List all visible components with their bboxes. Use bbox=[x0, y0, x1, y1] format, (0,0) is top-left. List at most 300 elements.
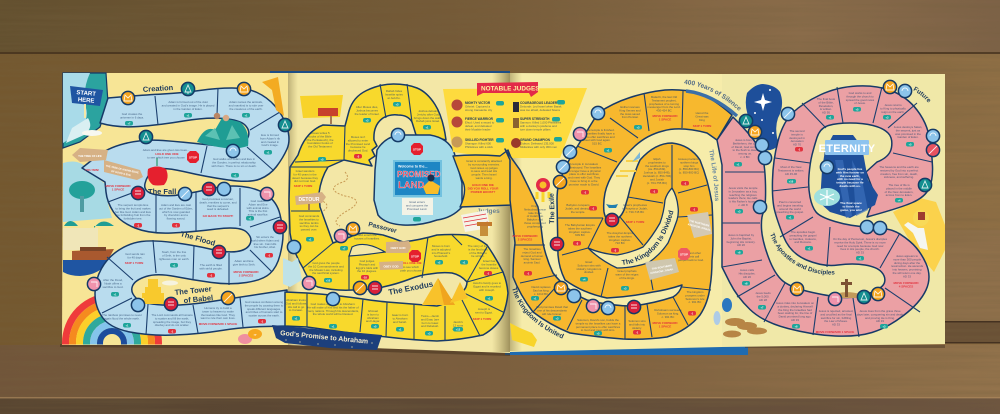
page 3 cell texts: Solomon, David's son, builds the bbox=[577, 318, 619, 322]
page 2 cell texts: household. bbox=[434, 254, 448, 258]
start here corner with flag bbox=[63, 73, 108, 148]
page 1 cell texts: God's image. bbox=[262, 143, 279, 147]
page 2 cell texts: God and follows bbox=[286, 301, 307, 305]
game tokens: all circular icons bbox=[87, 80, 940, 315]
page 3 score pills: +4 bbox=[583, 278, 586, 282]
page 4 cell texts: AD 70 bbox=[793, 143, 801, 147]
page 2 cell texts: (the Pentateuch), the bbox=[306, 138, 334, 142]
banner: God's Promise to Abraham: God's Promise to Abraham bbox=[280, 330, 368, 346]
page 2 cell texts: books of the Bible bbox=[309, 134, 332, 138]
page 3 score pills: -3 bbox=[614, 248, 617, 252]
page 4 cell texts bbox=[727, 91, 924, 334]
page 3 cell texts: take those bbox=[528, 211, 542, 215]
page 2 cell texts: Jericho after God bbox=[417, 112, 439, 116]
page 2 score pills: +3 bbox=[396, 102, 399, 106]
page 1 cell texts: disobey and do not scatter. bbox=[155, 323, 189, 327]
page 3 cell texts: Babylon and bbox=[527, 218, 543, 222]
page 3 cell texts: The new temple is finished. bbox=[579, 128, 615, 132]
page 1 cell texts: the creatures of the earth. bbox=[229, 107, 263, 111]
page 1 cell texts: his brother, Abel. bbox=[254, 245, 276, 249]
page 3 score pills: -1 bbox=[653, 190, 656, 194]
page 1 cell texts: and tribes of humans start to bbox=[246, 310, 283, 314]
eternity panel: dwells with us. bbox=[839, 184, 861, 188]
page 1 cell texts: speak different languages, bbox=[247, 307, 281, 311]
panel: pink spiral track, Jesus to Eternity bbox=[717, 86, 933, 337]
page 1 cell texts: give birth to Seth. bbox=[233, 262, 255, 266]
page 1 score pills: -1 bbox=[210, 274, 213, 278]
page 1 cell texts: Adam and Eve bbox=[235, 259, 254, 263]
page 3 cell texts: Israel's prophesies bbox=[623, 203, 648, 207]
page 4 cell texts: receive the Holy Spirit. There is no more bbox=[834, 240, 886, 244]
page 1 cell texts: from Adam's rib bbox=[260, 136, 280, 140]
sign: welcome to the promised land: PROMISED bbox=[397, 170, 441, 179]
page 2 cell texts: and is adopted bbox=[432, 247, 451, 251]
page 2 cell texts: Moses writes 5 bbox=[310, 131, 330, 135]
page 4 cell texts: the serpent, just as bbox=[896, 128, 921, 132]
banner: notable judges bbox=[477, 82, 540, 97]
page 4 cell texts: Jesus calls bbox=[740, 268, 755, 272]
page 1 score pills: +1 bbox=[249, 216, 252, 220]
page 4 cell texts: Most of the New bbox=[781, 165, 802, 169]
page 3 cell texts: Kings bbox=[531, 204, 539, 208]
page 2 cell texts: for 40 years in the bbox=[293, 172, 317, 176]
page 3 cell texts: Testament prophet, bbox=[652, 98, 677, 102]
page 3 cell texts: 1 SPACE bbox=[659, 117, 671, 121]
red slash token bbox=[926, 143, 940, 157]
orange crown tokens bbox=[121, 80, 897, 301]
page 4 cell texts: the 5,000. bbox=[757, 294, 770, 298]
Adam and Eve in the bush illustration bbox=[197, 113, 248, 149]
page 4 cell texts: to the flesh to dwell bbox=[733, 148, 758, 152]
page 3 score pills bbox=[524, 125, 698, 336]
page 2 cell texts: Joshua defeats bbox=[418, 109, 438, 113]
page 4 cell texts: AD 26 bbox=[737, 243, 745, 247]
page 1 cell texts: Noah, from the line bbox=[162, 250, 187, 254]
sign: exile signpost bbox=[645, 258, 679, 280]
page 3 cell texts: kingdom captive. bbox=[569, 230, 591, 234]
page 4 cell texts: across from to Eden. bbox=[886, 193, 913, 197]
page 3 cell texts: stop him bbox=[684, 164, 695, 168]
page 3 cell texts: Judah, and destroys bbox=[565, 206, 592, 210]
sign: exile signpost: KINGDOM: JUDAH bbox=[650, 267, 674, 275]
page 2 cell texts: God commands bbox=[299, 214, 320, 218]
page 4 cell texts: MOVE FORWARD 1 SPACE bbox=[816, 330, 854, 334]
page 1 cell texts: Adam names the animals, bbox=[229, 100, 263, 104]
page 4 cell texts: and Romans. bbox=[794, 240, 812, 244]
page 1 cell texts: God causes confusion among bbox=[245, 300, 284, 304]
page 3 cell texts: The Babylonian Empire bbox=[565, 223, 595, 227]
book cover edges bbox=[60, 71, 945, 356]
page 3 cell texts: MOVE FORWARD bbox=[652, 114, 678, 118]
page 4 cell texts: Paul is converted bbox=[779, 200, 801, 204]
Jesus figure illustration bbox=[904, 210, 929, 250]
page 4 cell texts: Jesus appears to bbox=[896, 254, 918, 258]
page 1 cell texts: to scatter and fill the earth, bbox=[155, 316, 189, 320]
heading: The Exile: The Exile bbox=[548, 193, 554, 224]
page 1 cell texts: Eve sin. Cain kills bbox=[254, 242, 277, 246]
panel: judges cell bbox=[453, 150, 512, 207]
page 3 cell texts: 722 BC bbox=[615, 241, 625, 245]
page 2 cell texts: Rahab hides bbox=[386, 89, 403, 93]
page 4 cell texts: temple is bbox=[791, 132, 803, 136]
panel: blue snake track, Creation to Babel bbox=[82, 88, 289, 335]
page 1 cell texts: Adam and Eve are cast bbox=[161, 203, 191, 207]
heading: The Apostles and Disciples: The Apostles and Disciples bbox=[770, 232, 835, 276]
page 4 score pills: +5 bbox=[909, 142, 912, 146]
page 2 cell texts: at Jericho. bbox=[387, 96, 401, 100]
page 2 cell texts: many nations. Through his descendants, bbox=[307, 309, 359, 313]
judges right column: Deborah: Led Israel when Barak bbox=[520, 104, 562, 108]
page 2 cell texts: desert because they bbox=[292, 176, 319, 180]
sign: detour bbox=[295, 192, 326, 210]
panel: judges cell: by surrounding enemies. bbox=[468, 162, 500, 166]
page 2 cell texts: SKIP 1 TURN bbox=[294, 184, 312, 188]
page 2 cell texts: to Abraham bbox=[393, 316, 408, 320]
page 2 cell texts: Moses is born bbox=[432, 244, 450, 248]
page 1 cell texts: Adam is formed out of the dust bbox=[168, 100, 208, 104]
page 2 score pills: +12 bbox=[456, 328, 461, 332]
sign: welcome to the promised land: LAND bbox=[398, 180, 425, 191]
page 2 cell texts: the sacrificial system. bbox=[312, 271, 340, 275]
sign: northern kingdom: KINGDOM: ISRAEL bbox=[687, 222, 712, 232]
page 2 cell texts: become slaves. bbox=[479, 266, 499, 270]
page 2 cell texts: Joshua becomes bbox=[356, 108, 378, 112]
page 1 cell texts: forbidden tree. bbox=[124, 217, 143, 221]
panel: judges cell: people. Then Israel bbox=[472, 173, 497, 177]
note: Israel enters the land bbox=[402, 198, 433, 215]
panel: judges cell: wants a king. bbox=[476, 176, 493, 180]
icon: apple bbox=[148, 158, 168, 186]
page 3 cell texts: one of his descendants bbox=[537, 308, 567, 312]
page 1 cell texts: to bring the fruit and makes bbox=[115, 206, 151, 210]
page 4 score pills: +1 bbox=[829, 116, 832, 120]
sign: the tree of life bbox=[72, 148, 108, 162]
eternity panel: the new earth, bbox=[840, 174, 860, 178]
page 4 score pills: +3 bbox=[738, 210, 741, 214]
panel: notable judges bbox=[443, 82, 587, 160]
page 1 cell texts: scatter across the earth. bbox=[248, 314, 280, 318]
page 4 cell texts: Jesus is rejected, arrested, bbox=[819, 309, 853, 313]
page 4 cell texts: God works to and bbox=[849, 91, 872, 95]
page 4 cell texts: AD 33 bbox=[876, 319, 884, 323]
sign: detour: DETOUR bbox=[298, 197, 320, 203]
heading: The Kingdom Is Divided: The Kingdom Is Divided bbox=[622, 210, 674, 265]
page 1 cell texts: The earth is filled bbox=[200, 263, 222, 267]
page 1 cell texts: and mankind is to rule over bbox=[229, 103, 263, 107]
bubbles: bottom corner decoration: !? bbox=[254, 333, 257, 337]
page 4 cell texts: Jesus rises from the grave three bbox=[859, 309, 901, 313]
page 2 cell texts: the leader of Israel. bbox=[355, 112, 380, 116]
page 3 score pills: -3 bbox=[576, 242, 579, 246]
page 3 cell texts: idolatry; kingdom is bbox=[577, 267, 602, 271]
panel: orange spiral track, Kingdom to Silence bbox=[505, 90, 737, 339]
judges right column: COURAGEOUS LEADER bbox=[520, 101, 558, 105]
page 1 cell texts: HOLD ONE ONE bbox=[155, 152, 179, 156]
page 3 cell texts: c. 931 BC bbox=[689, 300, 701, 304]
page 4 cell texts: it His Father's house. bbox=[729, 200, 757, 204]
page 1 cell texts: The rainbow promises to never bbox=[102, 313, 142, 317]
page 2 cell texts: the whole world will be blessed. bbox=[313, 312, 353, 316]
heading: The Exodus: The Exodus bbox=[388, 279, 434, 297]
page 2 cell texts: Isaac is born bbox=[392, 313, 409, 317]
teal tree tokens bbox=[139, 82, 932, 304]
eternity panel: game, you win! bbox=[840, 208, 862, 212]
panel: promised land lake bbox=[374, 135, 462, 225]
page 1 cell texts: want to rule their own lives. bbox=[201, 316, 236, 320]
page 1 cell texts: out of the Garden of Eden, bbox=[159, 206, 193, 210]
page 4 cell texts: MOVE FORWARD bbox=[893, 281, 919, 285]
judges left column: MIGHTY VICTOR bbox=[465, 101, 491, 105]
page 2 cell texts: Abraham trusts bbox=[286, 298, 306, 302]
page 2 cell texts: Israel has bbox=[483, 259, 496, 263]
page 2 score pills bbox=[292, 102, 493, 336]
page 3 cell texts: Solomon as king. bbox=[657, 311, 679, 315]
banner: notable judges: NOTABLE JUDGES bbox=[481, 86, 540, 92]
page 2 cell texts: path you choose bbox=[400, 268, 422, 272]
page 4 cell texts: AD 45-96 bbox=[785, 172, 797, 176]
page 3 cell texts: is destroyed. The Israelites bbox=[567, 165, 602, 169]
loaves and fish illustration bbox=[714, 298, 767, 338]
page 3 cell texts: people back to God. bbox=[678, 258, 704, 262]
page 3 cell texts: to Assyria or Judah, bbox=[622, 206, 648, 210]
judges left column: FIERCE WARRIOR bbox=[465, 117, 494, 121]
page 4 cell texts: around the world bbox=[779, 207, 801, 211]
page 3 cell texts: David replaces bbox=[531, 285, 551, 289]
page 2 cell texts: 12 sons bbox=[453, 323, 464, 327]
page 3 score pills: -1 bbox=[584, 190, 587, 194]
page 3 cell texts: Esther rescues bbox=[620, 105, 640, 109]
panel: judges cell: DID YOU ROLL YOUR bbox=[468, 186, 499, 190]
page 1 cell texts: Humans try to build a bbox=[204, 306, 232, 310]
page 3 cell texts: King Xerxes and bbox=[619, 108, 641, 112]
page 2 cell texts: to see which bbox=[403, 265, 419, 269]
page 3 cell texts: 2 SPACES bbox=[518, 237, 532, 241]
page 3 score pills: -1 bbox=[636, 330, 639, 334]
page 1 cell texts: animal sacrifice. bbox=[248, 213, 269, 217]
page 3 cell texts: idolatry. bbox=[632, 326, 642, 330]
page 1 cell texts: spreading the image, but they bbox=[153, 320, 192, 324]
page 4 cell texts: to King to physically bbox=[880, 106, 906, 110]
page 4 cell texts: AD 26 bbox=[743, 275, 751, 279]
stop sign: STOP bbox=[411, 254, 419, 258]
eternity panel: to finish the bbox=[842, 204, 860, 208]
page 3 score pills: -1 bbox=[684, 182, 687, 186]
heading: The Tower of Babel: of Babel bbox=[183, 293, 214, 305]
heading: Passover: Passover bbox=[368, 221, 398, 235]
heading: eternity: ETERNITY bbox=[819, 143, 876, 155]
page 3 cell texts: MOVE FORWARD bbox=[652, 321, 678, 325]
sign: welcome to the promised land: Welcome to the... bbox=[398, 164, 428, 168]
panel: judges cell: God raises up judges bbox=[470, 166, 498, 170]
heading: The Life of Jesus: The Life of Jesus bbox=[709, 149, 718, 201]
page 1 cell texts: in the Garden of Eden. bbox=[173, 107, 203, 111]
page 4 cell texts: John the Baptist, bbox=[730, 236, 752, 240]
page 4 score pills: +1 bbox=[808, 246, 811, 250]
stop sign: STOP bbox=[189, 156, 197, 160]
page 1 cell texts: again flood the whole earth. bbox=[104, 316, 140, 320]
judges right column: Gideon: Defeated 135,000 bbox=[520, 142, 554, 146]
page 4 cell texts: preaching the gospel. bbox=[776, 210, 804, 214]
sign: golden calf bbox=[386, 241, 411, 253]
page 2 cell texts: into Pharaoh's bbox=[432, 251, 451, 255]
orange slash tokens bbox=[221, 175, 567, 305]
judges left column: SKILLED FIGHTER bbox=[465, 138, 494, 142]
page 1 cell texts: MOVE FORWARD bbox=[233, 270, 259, 274]
stop sign: STOP bbox=[413, 148, 421, 152]
page 2 cell texts: Israelite spies bbox=[385, 92, 403, 96]
sign: exile signpost: THE SOUTHERN bbox=[651, 263, 672, 271]
page 1 cell texts: This is the first bbox=[249, 209, 268, 213]
judges left column bbox=[452, 100, 504, 149]
page 3 cell texts: 1 SPACE bbox=[659, 324, 671, 328]
page 2 cell texts: the Old Testament bbox=[308, 145, 332, 149]
page 3 score pills: -1 bbox=[592, 206, 595, 210]
page 2 cell texts bbox=[286, 89, 502, 331]
page 4 cell texts: of Jesus. bbox=[854, 101, 866, 105]
page 1 score pills: -1 bbox=[171, 330, 174, 334]
page 3 cell texts: no longer have a physical bbox=[568, 169, 601, 173]
page 2 cell texts: and Sarah. bbox=[393, 320, 407, 324]
heading: The Flood: The Flood bbox=[179, 229, 217, 248]
note: Israel enters the land: Promised Land. bbox=[407, 207, 427, 211]
judges left column: Shamgar: Killed 600 bbox=[465, 142, 491, 146]
page 4 cell texts: The heavens and the earth are bbox=[879, 165, 919, 169]
page 2 cell texts: Egypt and is reunited bbox=[473, 284, 501, 288]
page 2 score pills: +3 bbox=[366, 118, 369, 122]
page 1 score pills: +1 bbox=[187, 114, 190, 118]
page 1 cell texts: 2 SPACES bbox=[239, 273, 253, 277]
page 2 score pills: +1 bbox=[463, 260, 466, 264]
page 3 cell texts: SKIP 1 TURN bbox=[626, 220, 644, 224]
page 3 cell texts: takes the southern bbox=[568, 226, 592, 230]
page 4 score pills: +3 bbox=[886, 116, 889, 120]
page 2 cell texts: is born to bbox=[367, 312, 379, 316]
page 4 score pills: +3 bbox=[883, 324, 886, 328]
page 3 score pills: +3 bbox=[624, 286, 627, 290]
page 2 cell texts: allowed to enter bbox=[348, 138, 368, 142]
page 4 cell texts: Jesus returns bbox=[884, 103, 902, 107]
page 2 score pills: -3 bbox=[357, 154, 360, 158]
page 2 cell texts: is the first book bbox=[468, 247, 488, 251]
heading: 400 Years of Silence: 400 Years of Silence bbox=[684, 80, 741, 110]
heading: The Tower of Babel: The Tower bbox=[174, 284, 212, 297]
page 3 cell texts: permanent place to offer sacrifices bbox=[576, 325, 621, 329]
page 4 cell texts: been waiting for, the line of bbox=[778, 311, 812, 315]
page 4 cell texts: through the church to bbox=[846, 94, 874, 98]
gutter shading bbox=[288, 73, 522, 352]
page 3 cell texts: SKIP 1 TURN bbox=[693, 124, 711, 128]
page 3 cell texts: Hezekiah (c. 854-796) bbox=[643, 174, 671, 178]
page 4 cell texts: Jesus feeds bbox=[755, 291, 771, 295]
page 4 cell texts: and crucified as the final bbox=[820, 312, 852, 316]
page 4 cell texts: AD 33 bbox=[832, 323, 840, 327]
eternity panel: The final space bbox=[840, 201, 862, 205]
page 4 cell texts: David promised long ago. bbox=[779, 315, 812, 319]
page 3 cell texts: warn of the reigns bbox=[616, 272, 639, 276]
page 4 cell texts: was promised in the bbox=[895, 132, 921, 136]
page 4 cell texts: leaders there; He calls bbox=[729, 196, 758, 200]
judges left column: their Moabite leader bbox=[465, 128, 491, 132]
page 3 cell texts: Nebuchadnezzar bbox=[524, 207, 546, 211]
page 1 cell texts: God walks with Adam and Eve in bbox=[213, 157, 255, 161]
page 3 cell texts: meet with God again. bbox=[583, 138, 611, 142]
page 4 cell texts: beginning His ministry. bbox=[727, 240, 756, 244]
page 2 cell texts: SKIP 1 TURN bbox=[473, 317, 491, 321]
page 1 score pills: +1 bbox=[173, 264, 176, 268]
page 4 cell texts: Revelation, bbox=[819, 104, 833, 108]
page 2 cell texts: and Hagar. bbox=[366, 319, 380, 323]
page 2 cell texts: foundation books of bbox=[307, 141, 333, 145]
page 4 cell texts: His disciples. bbox=[739, 271, 756, 275]
kingdom divided slot bbox=[588, 188, 678, 268]
page 3 cell texts: The Israelites finally have a bbox=[579, 131, 615, 135]
page 4 cell texts: preaching the gospel bbox=[790, 233, 817, 237]
page 1 cell texts: the people by causing them to bbox=[245, 303, 284, 307]
page 4 cell texts: into heaven, promising bbox=[892, 268, 922, 272]
heading: The Kingdom Is United: The Kingdom Is United bbox=[512, 286, 564, 338]
page 3 score pills: -1 bbox=[527, 272, 530, 276]
passover cut-out bbox=[349, 244, 385, 256]
page 3 cell texts: demand a human bbox=[521, 254, 544, 258]
panel: judges cell: to save and lead His bbox=[471, 169, 498, 173]
page 1 cell texts: righteous man on earth. bbox=[159, 257, 189, 261]
page 3 cell texts: from Persian bbox=[622, 115, 639, 119]
page 2 cell texts: born to Isaac bbox=[422, 321, 439, 325]
page 1 cell texts: flaming sword. bbox=[167, 217, 186, 221]
page 1 cell texts: with sinful people. bbox=[200, 266, 223, 270]
page 3 cell texts: A temple in Jerusalem bbox=[570, 162, 599, 166]
page 2 cell texts: the Israelite bbox=[482, 262, 497, 266]
page 1 cell texts: God makes bbox=[251, 199, 266, 203]
page 2 cell texts: the 10 Commandments and bbox=[308, 264, 344, 268]
page 4 score pills: +8 bbox=[795, 324, 798, 328]
silence strip above the arc bbox=[686, 91, 737, 116]
panel: judges cell: HOLD ONE DIE bbox=[472, 183, 494, 187]
page 3 score pills: -1 bbox=[691, 312, 694, 316]
stop sign bbox=[187, 151, 199, 163]
page 4 cell texts: the Law of Moses. bbox=[824, 319, 848, 323]
panel: judges cell: Israel is constantly attacked bbox=[466, 159, 502, 163]
page 4 cell texts: and proving He is King. bbox=[865, 316, 895, 320]
page 1 cell texts: which is now guarded bbox=[162, 210, 190, 214]
page 1 cell texts: sacrifice to God. bbox=[103, 285, 124, 289]
page 1 cell texts: GO BACK TO START! bbox=[203, 214, 233, 218]
page 2 score pills: -10 bbox=[363, 276, 367, 280]
page 4 cell texts: Jesus is born in bbox=[735, 138, 755, 142]
page 3 cell texts: promise made to David. bbox=[569, 182, 599, 186]
page 2 cell texts: Jacob's family goes to bbox=[473, 281, 502, 285]
page 2 cell texts: and Esau (are bbox=[421, 317, 439, 321]
judges right column: Midianites with only 300 men bbox=[520, 145, 558, 149]
page 4 cell texts: of the New Jerusalem, bbox=[885, 190, 914, 194]
page 4 cell texts: to Gentiles, Judeans, bbox=[789, 237, 817, 241]
page 4 cell texts: of the Bible, bbox=[818, 100, 834, 104]
page 4 cell texts: The second bbox=[789, 129, 805, 133]
page 1 cell texts: Adam and Eve are given two trees... bbox=[143, 148, 189, 152]
page 1 cell texts: God sends rain bbox=[125, 252, 145, 256]
sign: welcome to the promised land bbox=[393, 160, 442, 197]
page 4 score pills: +8 bbox=[738, 250, 741, 254]
page 3 cell texts: and Josiah bbox=[650, 177, 664, 181]
yellow fortress illustration bbox=[300, 95, 343, 124]
page 2 score pills: +5 bbox=[374, 324, 377, 328]
tower strip at fold bbox=[262, 77, 284, 116]
page 4 score pills: +7 bbox=[761, 306, 764, 310]
page 2 score pills: +7 bbox=[343, 246, 346, 250]
open book illustration bbox=[283, 258, 302, 287]
page 2 cell texts: He will make of him and his the father of bbox=[307, 305, 359, 309]
note: Israel enters the land: and conquers the bbox=[406, 203, 429, 207]
